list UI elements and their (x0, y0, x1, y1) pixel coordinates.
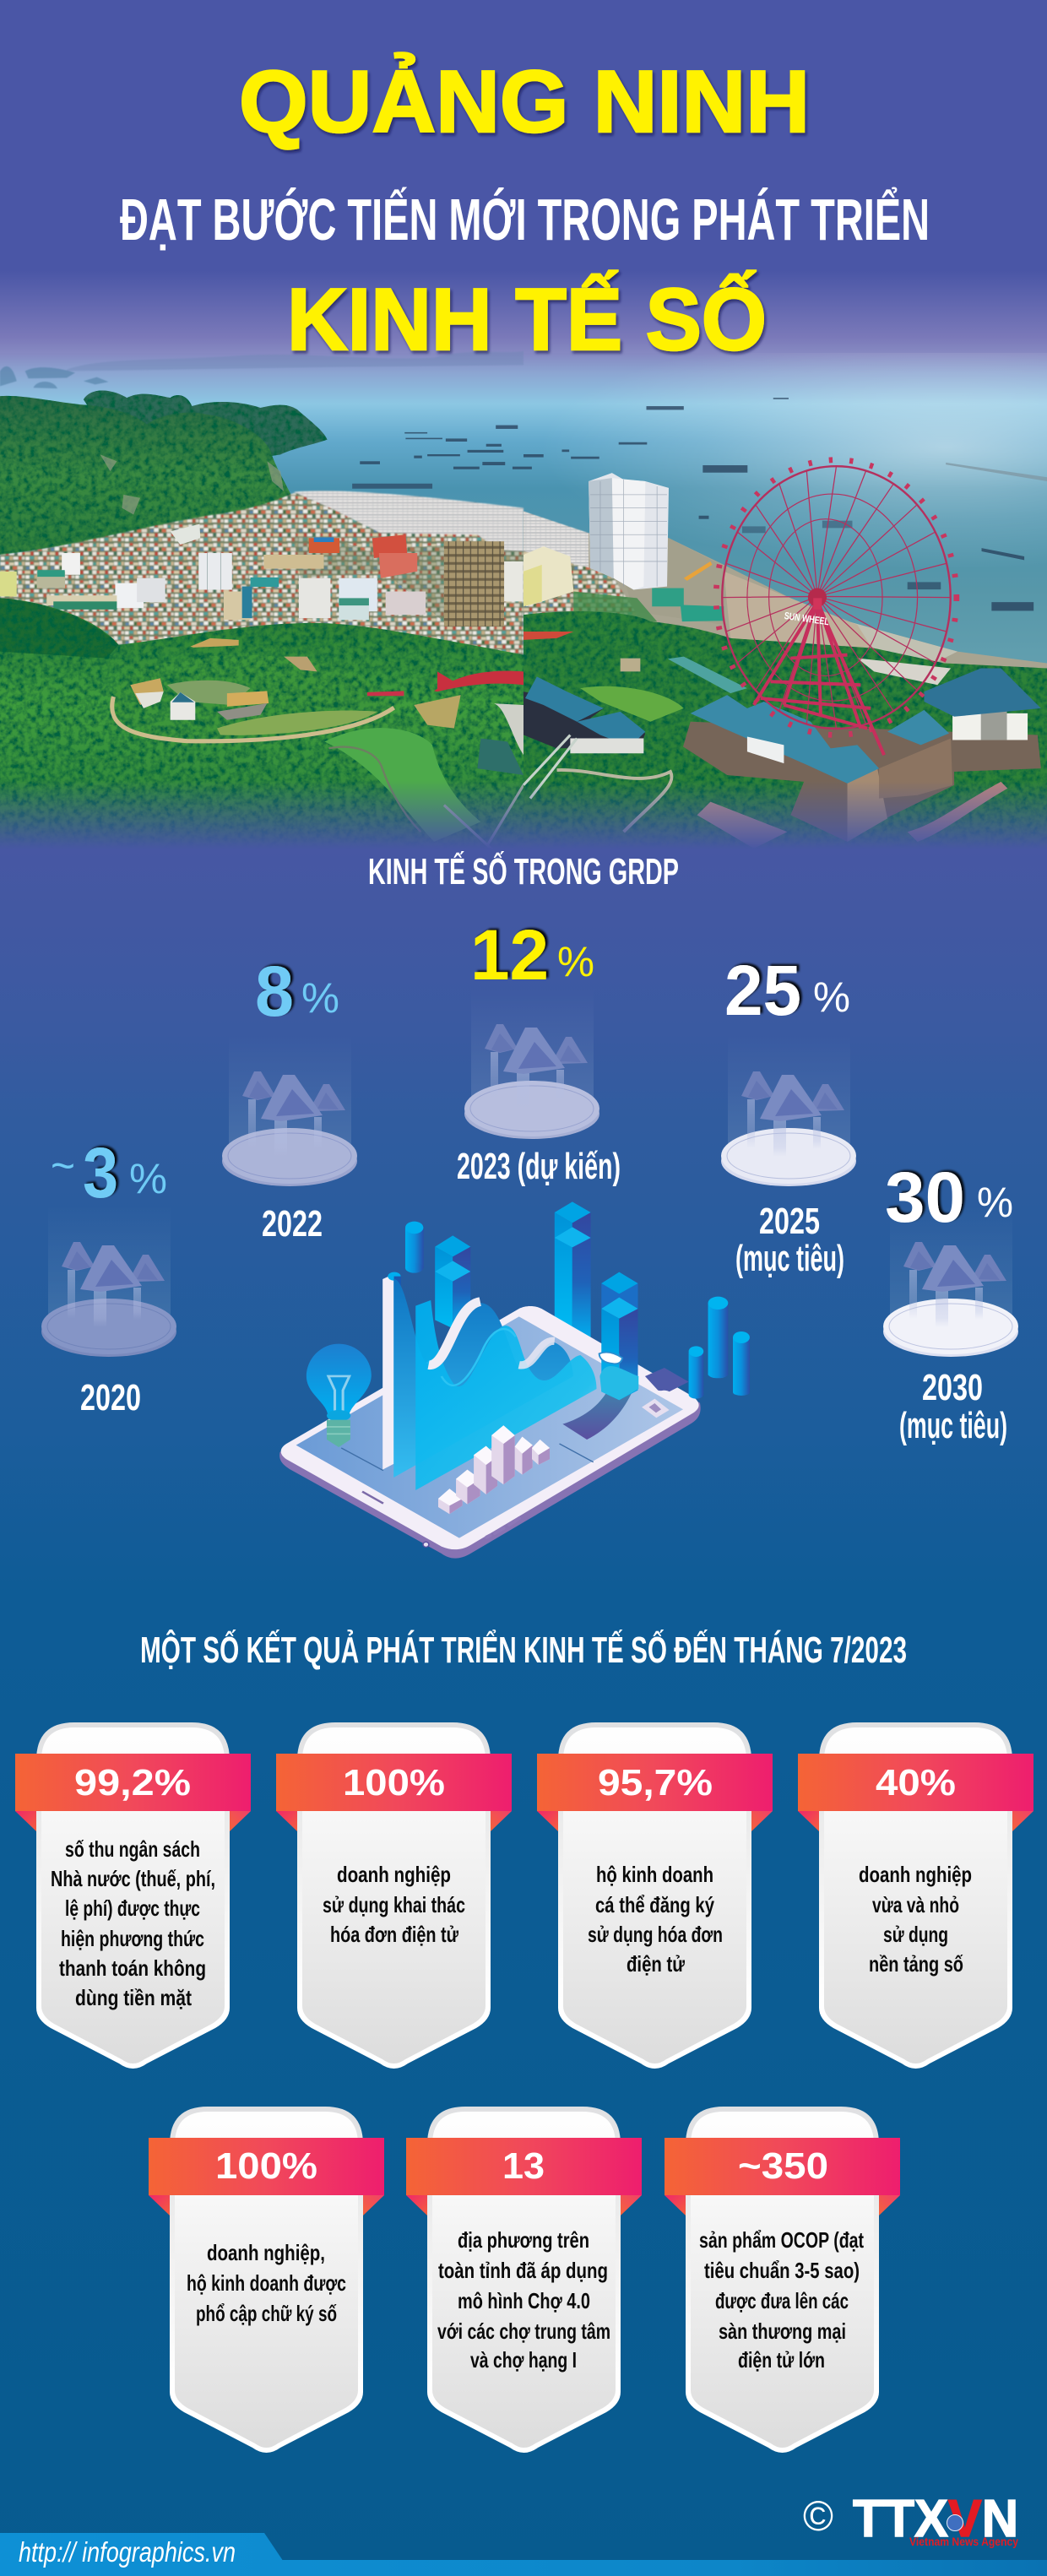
card: about 350 OCOP products: ~350 (738, 2145, 828, 2187)
pedestal 2025: 25% (target): (mục tiêu) (735, 1238, 844, 1279)
card: 13 localities: mô hình Chợ 4.0 (458, 2288, 590, 2313)
pedestal 2023: 12% (projected): % (557, 938, 594, 985)
pedestal 2030: 30% (target): 30 (885, 1158, 965, 1237)
card: 100% digital signature: doanh nghiệp, (207, 2240, 325, 2265)
card: 100% digital signature (149, 2107, 384, 2453)
pedestal 2020: about 3% (41, 1133, 176, 1418)
card: about 350 OCOP products: sản phẩm OCOP (đạt (699, 2227, 864, 2253)
card: about 350 OCOP products: được đưa lên các (715, 2288, 849, 2313)
card: 95,7%: 95,7% (598, 1762, 713, 1803)
logo: TTXVN: © (803, 2492, 833, 2540)
card: about 350 OCOP products (665, 2107, 900, 2453)
card: about 350 OCOP products: điện tử lớn (738, 2347, 825, 2373)
pedestal 2030: 30% (target): % (977, 1179, 1013, 1226)
card: 40%: sử dụng (883, 1922, 948, 1947)
card: 99,2% (15, 1722, 251, 2069)
logo: TTXVN: TTXVN (853, 2490, 1018, 2548)
pedestal 2020: about 3%: 2020 (80, 1377, 141, 1418)
card: 13 localities: và chợ hạng I (470, 2347, 577, 2373)
pedestal 2020: about 3%: 3 (83, 1133, 118, 1212)
pedestal 2020: about 3%: % (129, 1155, 167, 1202)
card: 99,2%: dùng tiền mặt (75, 1985, 192, 2010)
pedestal 2030: 30% (target) (883, 1158, 1018, 1446)
card: 99,2%: lệ phí) được thực (65, 1895, 200, 1921)
card: 100% businesses e-invoice: doanh nghiệp (337, 1862, 451, 1887)
title: Kinh tế số: KINH TẾ SỐ (287, 271, 767, 369)
pedestal 2025: 25% (target) (721, 951, 856, 1279)
pedestal 2023: 12% (projected) (457, 915, 621, 1187)
footer bar with website: http:// infographics.vn (19, 2536, 236, 2568)
pedestal 2022: 8% (222, 952, 357, 1245)
card: 99,2%: số thu ngân sách (65, 1836, 200, 1862)
card: 100% businesses e-invoice: sử dụng khai thác (323, 1892, 465, 1917)
card: about 350 OCOP products: sàn thương mại (719, 2318, 846, 2344)
card: 99,2%: 99,2% (74, 1762, 191, 1803)
card: 13 localities: toàn tỉnh đã áp dụng (438, 2258, 608, 2283)
card: 95,7% (537, 1722, 773, 2069)
logo: TTXVN: Vietnam News Agency (909, 2535, 1018, 2548)
card: 99,2%: thanh toán không (59, 1955, 206, 1981)
card: 100% digital signature: phổ cập chữ ký số (196, 2301, 337, 2326)
card: 13 localities (406, 2107, 642, 2453)
pedestal 2023: 12% (projected): 2023 (dự kiến) (457, 1146, 621, 1187)
title: Quảng Ninh: QUẢNG NINH (239, 53, 810, 151)
card: 100% businesses e-invoice (276, 1722, 512, 2069)
card: 13 localities: 13 (502, 2145, 545, 2187)
card: 40%: doanh nghiệp (859, 1862, 972, 1887)
card: 40% (798, 1722, 1033, 2069)
card: 100% digital signature: hộ kinh doanh được (187, 2270, 346, 2296)
aerial photo of Ha Long waterfront: SUN WHEEL (784, 610, 830, 627)
pedestal 2030: 30% (target): 2030 (922, 1367, 983, 1408)
card: 40%: 40% (876, 1762, 956, 1803)
pedestal 2022: 8%: 2022 (262, 1203, 323, 1245)
card: 99,2%: Nhà nước (thuế, phí, (51, 1866, 215, 1891)
card: 99,2%: hiện phương thức (61, 1926, 204, 1951)
pedestal 2025: 25% (target): 2025 (759, 1201, 820, 1242)
aerial photo of Ha Long waterfront (0, 351, 1047, 879)
pedestal 2025: 25% (target): % (813, 973, 850, 1021)
card: 95,7%: hộ kinh doanh (596, 1862, 713, 1887)
card: 40%: vừa và nhỏ (872, 1892, 959, 1917)
pedestal 2025: 25% (target): 25 (724, 951, 801, 1030)
card: 13 localities: địa phương trên (458, 2227, 589, 2253)
card: 100% digital signature: 100% (215, 2145, 317, 2187)
card: 13 localities: với các chợ trung tâm (437, 2318, 610, 2344)
heading: digital economy in GRDP: KINH TẾ SỐ TRONG GRDP (368, 849, 679, 892)
footer bar with website (0, 2533, 1047, 2576)
card: 100% businesses e-invoice: 100% (343, 1762, 445, 1803)
pedestal 2022: 8%: % (301, 974, 339, 1022)
card: 95,7%: sử dụng hóa đơn (588, 1922, 723, 1947)
pedestal 2022: 8%: 8 (255, 952, 294, 1031)
card: 95,7%: điện tử (627, 1951, 685, 1977)
pedestal 2020: about 3%: ~ (51, 1142, 75, 1190)
pedestal 2023: 12% (projected): 12 (470, 915, 549, 995)
illustration: tablet with charts and light bulb (279, 1201, 750, 1559)
card: 100% businesses e-invoice: hóa đơn điện tử (330, 1922, 458, 1947)
card: 40%: nền tảng số (869, 1951, 963, 1977)
card: 95,7%: cá thể đăng ký (595, 1892, 714, 1917)
card: about 350 OCOP products: tiêu chuẩn 3-5 sao) (704, 2258, 860, 2283)
